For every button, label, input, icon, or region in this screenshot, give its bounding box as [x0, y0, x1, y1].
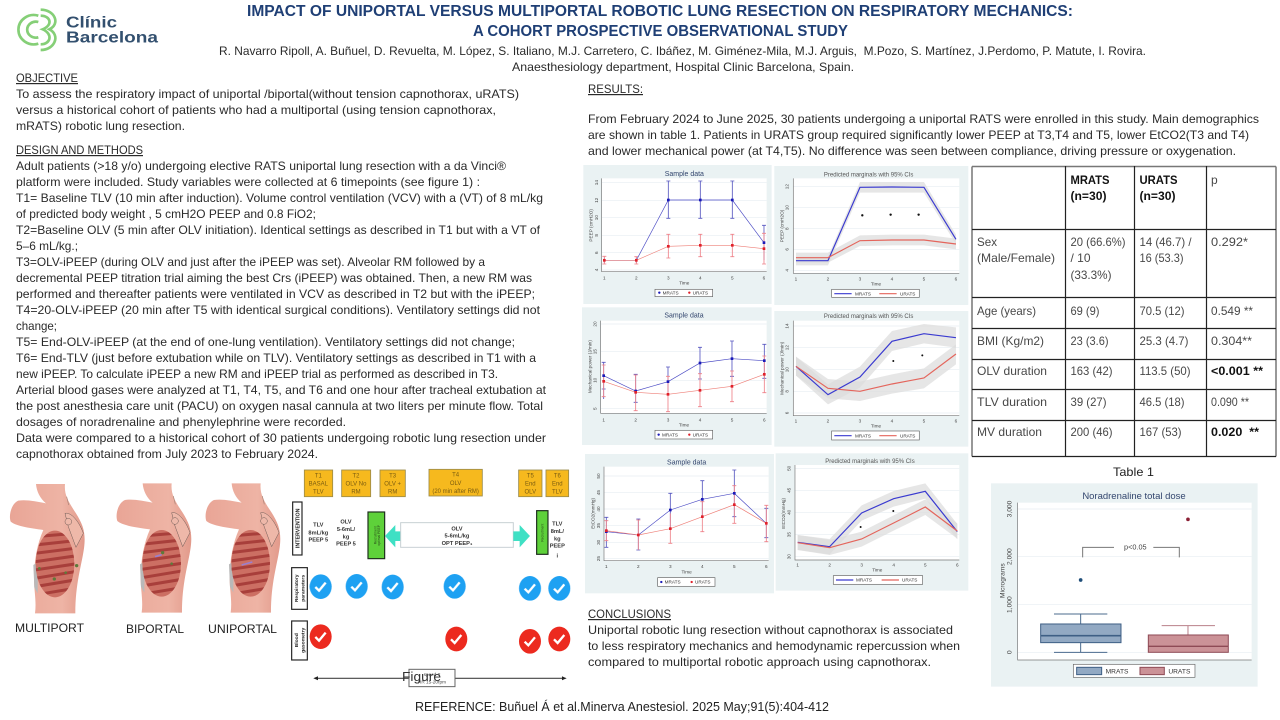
chart: mechanical power predicted marginals: Time	[871, 423, 881, 428]
intervention settings: PEEP 5	[308, 538, 328, 544]
table 1: demographics: 23 (3.6)	[1070, 334, 1108, 348]
chart: PEEP sample data: URATS	[693, 290, 708, 295]
timepoint boxes: OLV	[450, 481, 461, 487]
design and methods text block: performed and thereafter patients were ventilated in VCV as described in T2 but with the iPEEP;	[16, 287, 535, 301]
intervention settings: i	[557, 553, 559, 559]
chart: EtCO2 sample data: 50	[596, 473, 601, 479]
chart: mechanical power predicted marginals: 6	[955, 418, 958, 423]
timepoint boxes: TLV	[313, 490, 324, 496]
chart: PEEP predicted marginals: 6	[955, 277, 958, 282]
chart: noradrenaline box plot: p<0.05	[1124, 543, 1147, 552]
chart: mechanical power predicted marginals: URATS	[900, 433, 915, 438]
timepoint boxes: (20 min after RM)	[432, 489, 479, 495]
table 1: demographics: BMI (Kg/m2)	[977, 334, 1044, 348]
arrow: right	[513, 525, 530, 547]
design and methods text block: 5–6 mL/kg.;	[16, 239, 78, 253]
timepoint boxes: T5	[527, 474, 534, 480]
chart: EtCO2 sample data: 2	[637, 564, 640, 569]
chart: noradrenaline box plot	[991, 483, 1258, 687]
intervention settings	[308, 520, 565, 559]
timepoint boxes: T3	[389, 474, 397, 480]
authors and affiliation	[219, 44, 1146, 74]
chart: EtCO2 predicted marginals: 45	[787, 487, 792, 493]
row label: respiratory parameters: Respiratory	[294, 574, 300, 602]
chart: EtCO2 predicted marginals: URATS	[902, 578, 917, 583]
chart: EtCO2 predicted marginals: EtCO2(mmHg)	[781, 497, 786, 529]
chart: mechanical power predicted marginals: 5	[923, 418, 926, 423]
title: A COHORT PROSPECTIVE OBSERVATIONAL STUDY	[473, 23, 849, 40]
chart: mechanical power sample data: 10	[593, 377, 598, 383]
table 1: demographics: 25.3 (4.7)	[1140, 334, 1188, 348]
chart: PEEP sample data: 8	[594, 234, 599, 237]
OLV settings box	[401, 523, 513, 547]
table 1: demographics: 39 (27)	[1070, 395, 1106, 409]
design and methods text block: T6= End-TLV (just before extubation while on TLV). Ventilatory settings as described in T1 with a	[16, 351, 536, 365]
chart: PEEP sample data: 2	[635, 275, 638, 280]
chart: mechanical power sample data: 2	[634, 417, 637, 422]
table 1: demographics: (Male/Female)	[977, 251, 1055, 265]
design and methods text block: of predicted body weight , 5 cmH2O PEEP and 0.8 FiO2;	[16, 207, 316, 221]
chart: mechanical power sample data: 20	[593, 321, 598, 327]
chart: PEEP sample data	[583, 165, 772, 304]
table 1: demographics: 0.090 **	[1211, 395, 1249, 409]
results text block	[588, 82, 1259, 158]
chart: EtCO2 predicted marginals	[776, 453, 968, 591]
chart: PEEP sample data: 12	[594, 197, 599, 203]
table 1: demographics: URATS	[1140, 173, 1178, 187]
icon: uniportal torso	[206, 483, 280, 613]
design and methods text block: Adult patients (>18 y/o) undergoing elective RATS uniportal lung resection with a da Vinci®	[16, 159, 506, 173]
chart: mechanical power predicted marginals: 12	[785, 345, 790, 350]
chart: noradrenaline box plot: 2,000	[1007, 548, 1014, 565]
chart: EtCO2 predicted marginals: 5	[924, 563, 927, 568]
arrow: timeline	[313, 676, 567, 680]
intervention settings: 5-6mL/	[337, 527, 356, 533]
title: IMPACT OF UNIPORTAL VERSUS MULTIPORTAL ROBOTIC LUNG RESECTION ON RESPIRATORY MECHANICS:	[247, 3, 1073, 20]
intervention settings: PEEP 5	[336, 541, 356, 547]
OLV settings box: OPT PEEP₁	[442, 541, 473, 547]
timepoint boxes	[304, 469, 569, 497]
table 1: demographics: TLV duration	[977, 395, 1047, 409]
results text block: From February 2024 to June 2025, 30 patients undergoing a uniportal RATS were enrolled in this study. Main demographics	[588, 112, 1259, 126]
chart: mechanical power predicted marginals: Predicted marginals with 95% CIs	[824, 314, 913, 320]
chart: PEEP sample data: Sample data	[665, 171, 704, 178]
chart: PEEP predicted marginals: 2	[827, 277, 830, 282]
arrow: left	[385, 525, 401, 547]
table 1: demographics: MV duration	[977, 425, 1042, 439]
table 1: demographics: 70.5 (12)	[1140, 304, 1185, 318]
chart: mechanical power predicted marginals: 2	[827, 418, 830, 423]
OLV settings box: OLV	[451, 526, 463, 532]
table 1: demographics: (33.3%)	[1070, 268, 1112, 282]
table 1: demographics: / 10	[1070, 251, 1091, 265]
design and methods text block: Data were compared to a historical cohort of 30 patients undergoing robotic lung resection under	[16, 431, 546, 445]
timepoint boxes: OLV +	[384, 482, 402, 488]
chart: PEEP sample data: MRATS	[663, 290, 679, 295]
timepoint boxes: End	[525, 482, 536, 488]
chart: EtCO2 sample data: EtCO2(mmHg)	[591, 497, 596, 529]
figure 1: study timeline	[292, 469, 570, 687]
intervention settings: kg	[554, 536, 561, 542]
chart: PEEP sample data: 3	[667, 275, 670, 280]
chart: PEEP predicted marginals: MRATS	[855, 291, 871, 296]
recruitment manoeuvre box 1: Recruitment	[373, 526, 377, 544]
table 1: demographics: 14 (46.7) /	[1140, 235, 1192, 249]
chart: mechanical power predicted marginals: 1	[795, 418, 798, 423]
chart: PEEP sample data: 6	[763, 275, 766, 280]
chart: EtCO2 sample data: 45	[596, 490, 601, 495]
chart: PEEP predicted marginals: 4	[785, 269, 790, 272]
timepoint boxes: T6	[554, 474, 561, 480]
objective text block: mRATS) robotic lung resection.	[16, 119, 185, 133]
chart: PEEP predicted marginals: 8	[785, 227, 790, 230]
conclusions text block	[588, 607, 960, 669]
table 1: demographics: MRATS	[1070, 173, 1110, 187]
timeline note box: speed #	[424, 672, 441, 677]
intervention settings: PEEP	[550, 544, 565, 550]
chart: EtCO2 sample data: 3	[669, 564, 672, 569]
chart: mechanical power sample data: 1	[602, 417, 605, 422]
timepoint boxes: T4	[452, 473, 460, 479]
chart: mechanical power sample data: Mechanical power (J/min)	[587, 340, 592, 393]
timepoint boxes: RM	[351, 490, 361, 496]
row label: blood gasometry: Blood	[294, 633, 300, 647]
chart: EtCO2 sample data: Sample data	[667, 460, 706, 467]
chart: mechanical power predicted marginals: 14	[785, 323, 790, 329]
design and methods text block: T3=OLV-iPEEP (during OLV and just after the iPEEP was set). Alveolar RM followed by a	[16, 255, 485, 269]
timepoint boxes: T2	[353, 474, 360, 480]
table 1: demographics: (n=30)	[1070, 189, 1106, 203]
table 1: demographics: 16 (53.3)	[1140, 251, 1184, 265]
chart: PEEP predicted marginals: 10	[785, 205, 790, 210]
chart: mechanical power sample data: 4	[699, 417, 702, 422]
OLV settings box: 5-6mL/kg	[445, 534, 470, 540]
chart: noradrenaline box plot: MRATS	[1106, 668, 1129, 675]
icon: red check marks	[310, 624, 570, 654]
timepoint boxes: RM	[388, 490, 397, 496]
design and methods text block: T5= End-OLV-iPEEP (at the end of one-lung ventilation). Ventilatory settings did not change;	[16, 335, 515, 349]
chart: PEEP predicted marginals: Time	[871, 281, 881, 286]
chart: PEEP sample data: 14	[594, 180, 599, 185]
design and methods text block: capnothorax obtained from July 2023 to February 2024.	[16, 447, 318, 461]
chart: EtCO2 sample data: 30	[596, 539, 601, 545]
table 1: demographics: 0.292*	[1211, 235, 1248, 249]
design and methods text block: T2=Baseline OLV (5 min after OLV initiation). Identical settings as described in T1 but with a VT of	[16, 223, 541, 237]
conclusions text block: Uniportal robotic lung resection without capnothorax is associated	[588, 623, 953, 637]
row label: respiratory parameters	[292, 568, 307, 609]
chart: mechanical power predicted marginals: Mechanical power (J/min)	[779, 341, 784, 395]
authors and affiliation: Anaesthesiology department, Hospital Clinic Barcelona, Spain.	[512, 60, 854, 74]
chart: EtCO2 predicted marginals: 4	[892, 563, 895, 568]
chart: noradrenaline box plot: 3,000	[1007, 500, 1014, 517]
conclusions text block: compared to multiportal robotic approach using capnothorax.	[588, 655, 931, 669]
results text block: are shown in table 1. Patients in URATS group required significantly lower PEEP at T3,T4 and T5, lower EtCO2(T3 and T4)	[588, 128, 1249, 142]
table 1: demographics: 200 (46)	[1070, 425, 1112, 439]
chart: PEEP predicted marginals: Predicted marginals with 95% CIs	[824, 172, 913, 178]
surgical approaches illustration: BIPORTAL	[126, 622, 184, 636]
chart: PEEP predicted marginals	[774, 166, 968, 305]
row label: intervention	[293, 502, 302, 555]
table 1: demographics	[972, 166, 1276, 457]
figure 1: study timeline: Figure	[402, 670, 441, 684]
chart: mechanical power predicted marginals: 6	[785, 411, 790, 414]
timepoint boxes: End	[552, 482, 563, 488]
logo: Clínic Barcelona: Clínic	[66, 14, 117, 32]
chart: PEEP sample data: Time	[679, 281, 690, 286]
design and methods text block: platform were included. Study variables were collected at 6 timepoints (see figure 1) :	[16, 175, 480, 189]
recruitment manoeuvre box 2	[537, 511, 548, 554]
table 1: demographics: 167 (53)	[1140, 425, 1182, 439]
table 1: demographics: 113.5 (50)	[1140, 364, 1191, 378]
reference: REFERENCE: Buñuel Á et al.Minerva Anestesiol. 2025 May;91(5):404-412	[415, 699, 829, 714]
chart: mechanical power sample data: Sample data	[664, 313, 704, 320]
chart: EtCO2 predicted marginals: 2	[828, 563, 831, 568]
table 1: demographics: 20 (66.6%)	[1070, 235, 1126, 249]
objective text block: versus a historical cohort of patients who had a multiportal (using tension capnothorax,	[16, 103, 496, 117]
surgical approaches illustration	[10, 483, 280, 636]
chart: PEEP sample data: 1	[603, 275, 606, 280]
chart: EtCO2 predicted marginals: 30	[787, 554, 792, 559]
chart: noradrenaline box plot: 1,000	[1007, 596, 1014, 613]
intervention settings: 8mL/	[551, 529, 564, 535]
chart: PEEP sample data: 4	[699, 275, 702, 280]
table 1: demographics: Age (years)	[977, 304, 1036, 318]
chart: EtCO2 sample data: 25	[596, 556, 601, 561]
chart: EtCO2 sample data: 35	[596, 523, 601, 528]
chart: mechanical power predicted marginals: 4	[891, 418, 894, 423]
chart: mechanical power sample data: URATS	[693, 432, 708, 437]
table 1: demographics: 0.304**	[1211, 334, 1252, 348]
table 1: demographics: 0.549 **	[1211, 304, 1253, 318]
chart: mechanical power sample data: 5	[593, 407, 598, 410]
chart: mechanical power sample data: 15	[593, 349, 598, 354]
results text block: RESULTS:	[588, 82, 643, 96]
chart: EtCO2 sample data: MRATS	[665, 580, 681, 585]
chart: EtCO2 predicted marginals: MRATS	[856, 578, 872, 583]
intervention settings: TLV	[552, 522, 563, 528]
design and methods text block: Arterial blood gases were analyzed at T1, T4, T5, and T6 and one hour after tracheal extubation at	[16, 383, 547, 397]
chart: EtCO2 sample data: 1	[605, 564, 608, 569]
chart: mechanical power predicted marginals: 3	[859, 418, 862, 423]
design and methods text block: the post anesthesia care unit (PACU) on oxygen nasal cannula at two liters per minute flow. Total	[16, 399, 543, 413]
chart: PEEP predicted marginals: 6	[785, 248, 790, 251]
logo: Clínic Barcelona	[18, 10, 158, 50]
row label: intervention: INTERVENTION	[295, 508, 301, 548]
design and methods text block: decremental PEEP titration trial aiming the best Crs (iPEEP) was obtained. Then, a new RM was	[16, 271, 532, 285]
chart: PEEP sample data: 5	[731, 275, 734, 280]
intervention settings: 8mL/kg	[308, 531, 329, 537]
chart: EtCO2 sample data: URATS	[695, 580, 710, 585]
timeline note box	[409, 669, 455, 687]
chart: EtCO2 predicted marginals: 50	[787, 465, 792, 471]
design and methods text block: dosages of noradrenaline and phenylephrine were recorded.	[16, 415, 346, 429]
chart: mechanical power sample data: 3	[667, 417, 670, 422]
chart: EtCO2 predicted marginals: Time	[872, 568, 883, 573]
chart: PEEP sample data: 10	[594, 215, 599, 220]
intervention settings: kg	[343, 534, 350, 540]
design and methods text block: DESIGN AND METHODS	[16, 143, 143, 157]
chart: PEEP sample data: 6	[594, 251, 599, 254]
recruitment manoeuvre box 2: Recruitment	[540, 524, 544, 542]
table 1: demographics: Sex	[977, 235, 997, 249]
chart: EtCO2 predicted marginals: Predicted marginals with 95% CIs	[825, 459, 915, 465]
icon: multiport torso	[10, 484, 85, 613]
timepoint boxes: OLV	[525, 490, 536, 496]
surgical approaches illustration: UNIPORTAL	[208, 622, 277, 636]
design and methods text block: T4=20-OLV-iPEEP (20 min after T5 with identical surgical conditions). Ventilatory settings did not	[16, 303, 541, 317]
intervention settings: TLV	[313, 523, 324, 529]
conclusions text block: CONCLUSIONS	[588, 607, 671, 621]
table 1: demographics: 69 (9)	[1070, 304, 1100, 318]
objective text block: To assess the respiratory impact of uniportal /biportal(without tension capnothorax, uRATS)	[16, 87, 519, 101]
timepoint boxes: BASAL	[309, 482, 329, 488]
chart: EtCO2 predicted marginals: 3	[860, 563, 863, 568]
table 1: demographics: <0.001 **	[1211, 364, 1263, 378]
chart: PEEP predicted marginals: 4	[891, 277, 894, 282]
surgical approaches illustration: MULTIPORT	[15, 621, 85, 635]
chart: PEEP predicted marginals: PEEP (cmH2O)	[779, 209, 784, 242]
chart: noradrenaline box plot: URATS	[1168, 668, 1191, 675]
chart: EtCO2 sample data	[585, 454, 774, 593]
authors and affiliation: R. Navarro Ripoll, A. Buñuel, D. Revuelta, M. López, S. Italiano, M.J. Carretero, C. Ibáñez, M. Giménez-Mila, M.J. Arguis, M.Pozo, S. Martínez, J.Perdomo, P. Matute, I. Rovira.	[219, 44, 1146, 58]
chart: EtCO2 sample data: 6	[765, 564, 768, 569]
table caption: Table 1	[1113, 465, 1154, 479]
chart: mechanical power predicted marginals	[774, 311, 968, 447]
chart: EtCO2 sample data: 5	[733, 564, 736, 569]
chart: mechanical power predicted marginals: MRATS	[855, 433, 871, 438]
timepoint boxes: T1	[315, 474, 322, 480]
design and methods text block	[16, 143, 547, 461]
chart: mechanical power sample data: MRATS	[662, 432, 678, 437]
chart: noradrenaline box plot: 0	[1007, 650, 1014, 654]
objective text block: OBJECTIVE	[16, 71, 78, 85]
icon: biportal torso	[117, 483, 191, 613]
table 1: demographics: (n=30)	[1140, 189, 1176, 203]
chart: mechanical power sample data	[582, 307, 772, 445]
chart: mechanical power sample data: 6	[763, 417, 766, 422]
chart: noradrenaline box plot: Micrograms	[1000, 563, 1007, 598]
chart: PEEP sample data: 4	[594, 268, 599, 271]
chart: noradrenaline box plot: Noradrenaline total dose	[1082, 491, 1186, 502]
intervention settings: OLV	[340, 520, 352, 526]
table 1: demographics: 0.020 **	[1211, 425, 1259, 439]
chart: mechanical power sample data: Time	[679, 422, 689, 427]
chart: PEEP predicted marginals: 5	[923, 277, 926, 282]
recruitment manoeuvre box 1: optimal PEEP	[377, 524, 381, 546]
chart: PEEP predicted marginals: URATS	[900, 291, 915, 296]
chart: PEEP sample data: PEEP (cmH2O)	[588, 209, 593, 242]
timepoint boxes: TLV	[552, 490, 563, 496]
row label: blood gasometry: gasometry	[301, 627, 307, 653]
conclusions text block: to less respiratory mechanics and hemodynamic repercussion when	[588, 639, 960, 653]
chart: PEEP predicted marginals: 3	[859, 277, 862, 282]
chart: EtCO2 predicted marginals: 35	[787, 532, 792, 537]
design and methods text block: new iPEEP. To calculate iPEEP a new RM and iPEEP trial as performed as described in T3.	[16, 367, 498, 381]
design and methods text block: T1= Baseline TLV (10 min after induction). Volume control ventilation (VCV) with a (VT) of 8 mL/kg	[16, 191, 543, 205]
table 1: demographics: 46.5 (18)	[1140, 395, 1185, 409]
title	[247, 3, 1073, 40]
table 1: demographics: p	[1211, 173, 1218, 187]
chart: EtCO2 predicted marginals: 1	[796, 563, 799, 568]
chart: mechanical power predicted marginals: 8	[785, 390, 790, 393]
row label: blood gasometry	[292, 621, 307, 660]
recruitment manoeuvre box 1	[368, 512, 385, 559]
results text block: and lower mechanical power (at T4,T5). No difference was seen between compliance, driving pressure or oxygenation.	[588, 144, 1236, 158]
icon: blue check marks	[310, 574, 570, 601]
chart: mechanical power sample data: 5	[731, 417, 734, 422]
logo: Clínic Barcelona: Barcelona	[66, 30, 158, 46]
chart: EtCO2 predicted marginals: 40	[787, 509, 792, 515]
timepoint boxes: OLV No	[346, 482, 367, 488]
table 1: demographics: OLV duration	[977, 364, 1047, 378]
objective text block	[16, 71, 519, 133]
timeline note box: RR 15-20rpm	[418, 680, 446, 685]
chart: EtCO2 sample data: 40	[596, 506, 601, 512]
design and methods text block: change;	[16, 319, 57, 333]
chart: EtCO2 predicted marginals: 6	[956, 563, 959, 568]
table 1: demographics: 163 (42)	[1070, 364, 1112, 378]
chart: EtCO2 sample data: 4	[701, 564, 704, 569]
chart: EtCO2 sample data: Time	[682, 569, 692, 574]
chart: PEEP predicted marginals: 12	[785, 184, 790, 189]
row label: respiratory parameters: parameters	[301, 575, 307, 602]
chart: mechanical power predicted marginals: 10	[785, 367, 790, 372]
chart: PEEP predicted marginals: 1	[795, 277, 798, 282]
